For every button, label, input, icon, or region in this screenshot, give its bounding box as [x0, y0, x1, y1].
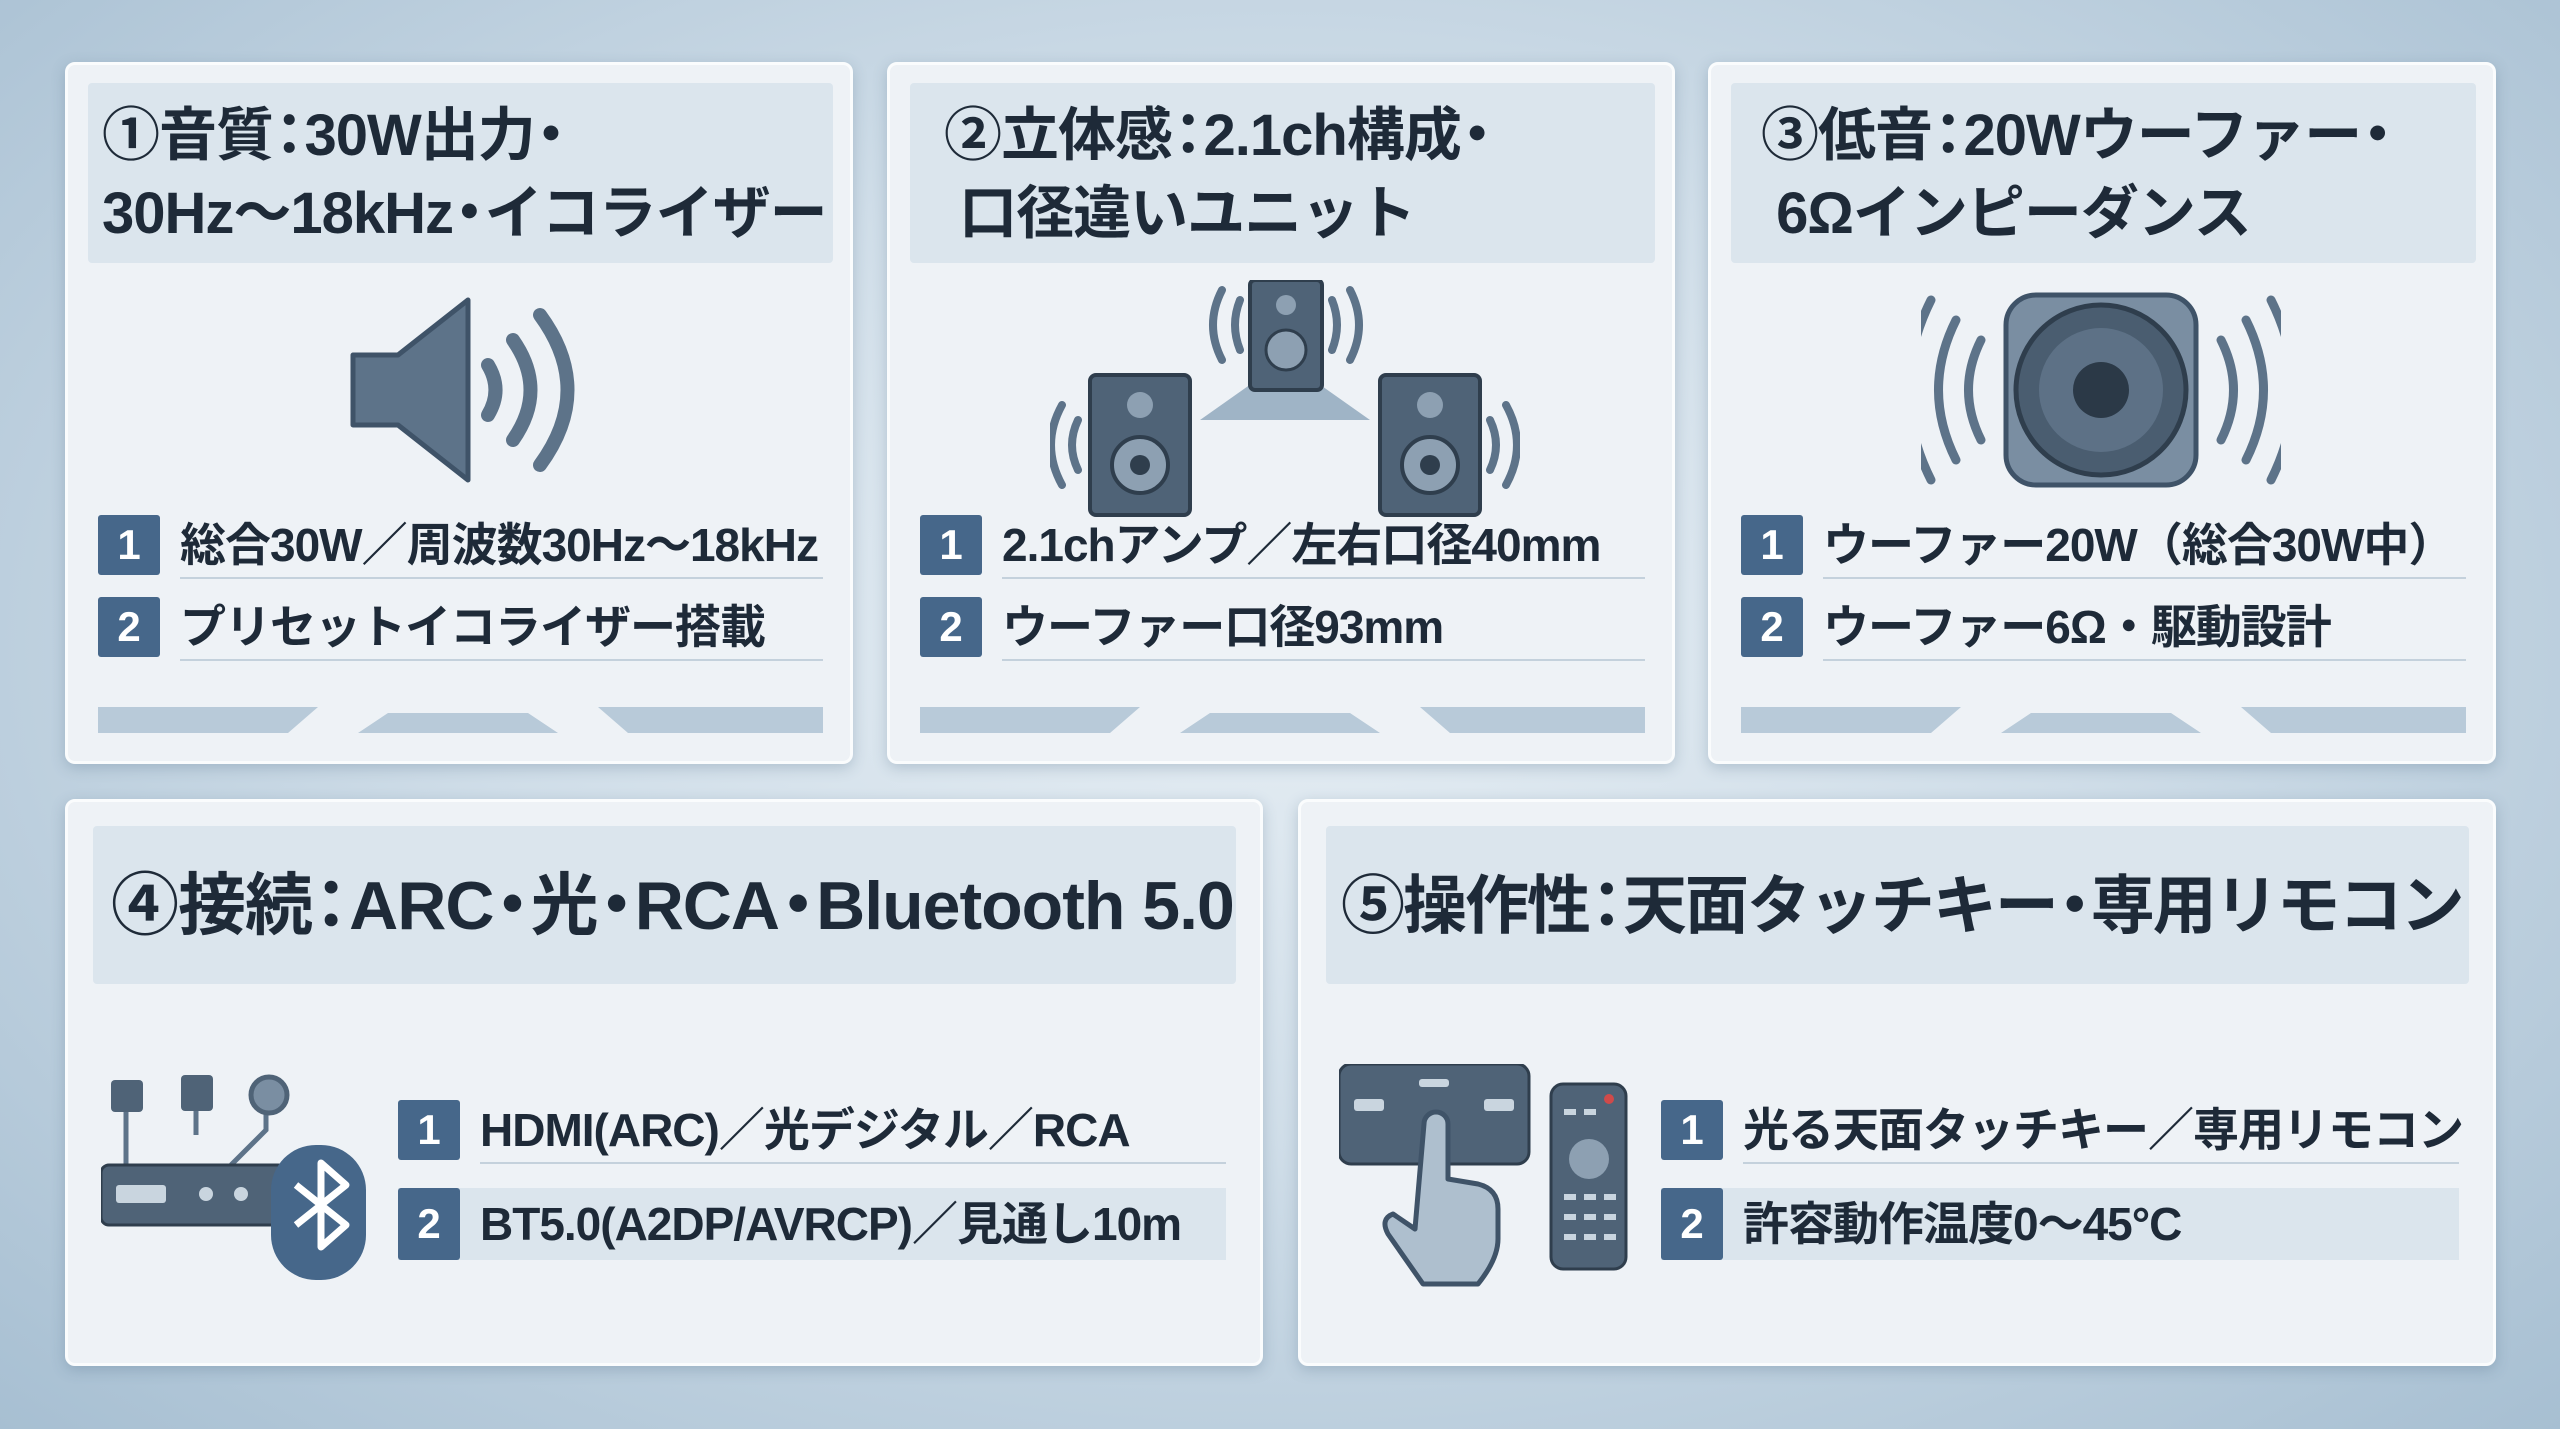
item 2: 2 — [117, 603, 141, 650]
heading — [88, 83, 833, 263]
item 1: 1 — [939, 521, 963, 568]
heading — [93, 826, 1236, 984]
item 1 — [920, 515, 1645, 579]
heading: 口径違いユニット — [959, 181, 1415, 246]
panel: operability — [1298, 799, 2496, 1366]
item 1: 光る天面タッチキー／専用リモコン — [1743, 1104, 2463, 1156]
icon: connectors and bluetooth — [101, 1074, 366, 1280]
item 2: 許容動作温度0〜45°C — [1743, 1198, 2181, 1250]
panel: bass — [1708, 62, 2496, 764]
icon: speaker — [350, 298, 574, 482]
item 1: 1 — [1760, 521, 1784, 568]
item 2: 2 — [1760, 603, 1784, 650]
item 2: プリセットイコライザー搭載 — [180, 601, 765, 653]
item 1 — [398, 1100, 1226, 1164]
item 1: 1 — [417, 1106, 441, 1153]
item 2: BT5.0(A2DP/AVRCP)／見通し10m — [480, 1198, 1181, 1250]
heading: 30Hz〜18kHz・イコライザー — [102, 181, 827, 246]
heading: ①音質：30W出力・ — [102, 103, 579, 168]
heading — [1326, 826, 2469, 984]
panel: connectivity — [65, 799, 1263, 1366]
heading — [910, 83, 1655, 263]
item 1: HDMI(ARC)／光デジタル／RCA — [480, 1104, 1130, 1156]
icon: 2.1ch speakers — [1050, 280, 1520, 517]
item 2: ウーファー6Ω・駆動設計 — [1823, 601, 2331, 653]
panel: stereo — [887, 62, 1675, 764]
icon: touch panel and remote — [1339, 1064, 1628, 1286]
item 2 — [98, 597, 823, 661]
item 2: ウーファー口径93mm — [1002, 601, 1443, 653]
heading: ⑤操作性：天面タッチキー・専用リモコン — [1341, 870, 2463, 942]
item 1: 1 — [1680, 1106, 1704, 1153]
item 2: 2 — [1680, 1200, 1704, 1247]
item 2: 2 — [417, 1200, 441, 1247]
item 2 — [1661, 1188, 2459, 1260]
item 2 — [398, 1188, 1226, 1260]
panel: sound quality — [65, 62, 853, 764]
heading: ④接続：ARC・光・RCA・Bluetooth 5.0 — [111, 868, 1234, 944]
item 2 — [1741, 597, 2466, 661]
item 1: 1 — [117, 521, 141, 568]
icon: woofer — [1921, 292, 2281, 488]
heading: ③低音：20Wウーファー・ — [1761, 103, 2406, 168]
item 2: 2 — [939, 603, 963, 650]
heading: 6Ωインピーダンス — [1776, 181, 2251, 246]
item 1: 2.1chアンプ／左右口径40mm — [1002, 519, 1600, 571]
heading: ②立体感：2.1ch構成・ — [944, 103, 1505, 168]
heading — [1731, 83, 2476, 263]
item 2 — [920, 597, 1645, 661]
item 1: ウーファー20W（総合30W中） — [1823, 519, 2453, 571]
item 1: 総合30W／周波数30Hz〜18kHz — [180, 519, 818, 571]
